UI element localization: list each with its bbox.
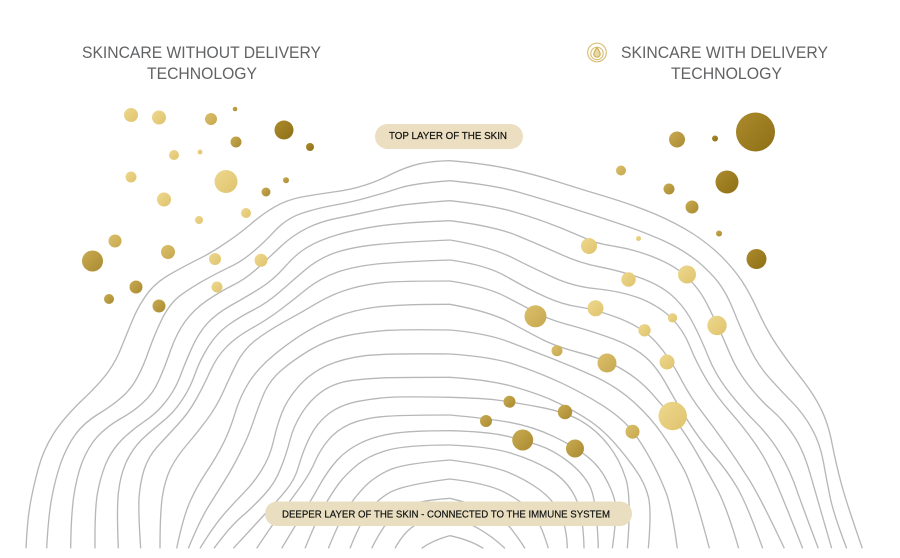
heading: skincare with delivery technology: SKINCARE WITH DELIVERY xyxy=(621,43,828,62)
heading: skincare with delivery technology xyxy=(621,43,828,83)
gold particles without delivery technology xyxy=(82,107,314,312)
gold particles with delivery technology xyxy=(480,112,775,458)
heading: skincare without delivery technology: SKINCARE WITHOUT DELIVERY xyxy=(82,43,321,62)
contour lines: layers of the skin xyxy=(26,161,862,548)
heading: skincare without delivery technology xyxy=(82,43,321,83)
label pill: deeper layer of the skin xyxy=(265,502,632,526)
heading: skincare with delivery technology: TECHNOLOGY xyxy=(671,64,782,83)
label pill: top layer of the skin xyxy=(375,124,523,149)
label pill: top layer of the skin: TOP LAYER OF THE SKIN xyxy=(389,130,507,142)
heading: skincare without delivery technology: TECHNOLOGY xyxy=(147,64,257,83)
icon: gold droplet emblem xyxy=(588,43,606,62)
label pill: deeper layer of the skin: DEEPER LAYER OF THE SKIN - CONNECTED TO THE IMMUNE SYSTEM xyxy=(282,508,610,520)
